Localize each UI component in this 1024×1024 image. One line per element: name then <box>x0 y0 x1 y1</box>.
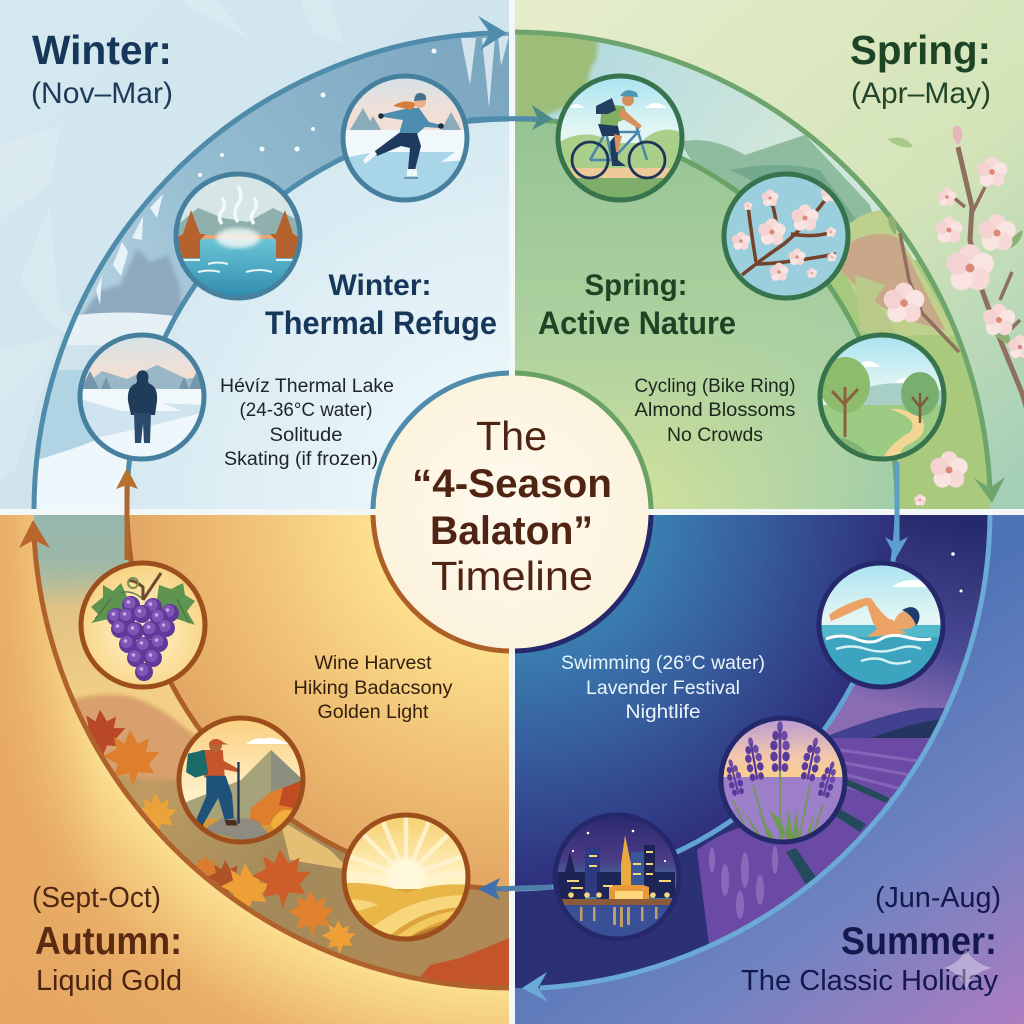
icon: Hévíz thermal lake <box>176 174 300 298</box>
icon: swimmer <box>819 563 943 687</box>
activities: autumn: Hiking Badacsony <box>294 678 453 699</box>
arrow: summer outer head <box>522 972 548 1002</box>
icon: golden sun over fields <box>344 815 468 939</box>
arrow: spring to summer <box>885 462 908 558</box>
activities: spring: Almond Blossoms <box>634 400 796 421</box>
inner autumn arc <box>127 515 509 889</box>
title text: Balaton” <box>430 509 593 553</box>
panel: winter <box>0 0 509 509</box>
arrow: spring outer head <box>974 477 1005 503</box>
icon: hiker <box>179 718 303 842</box>
dates: autumn: (Sept-Oct) <box>32 882 161 914</box>
icon: spring path and trees <box>820 335 944 459</box>
panel: autumn <box>0 515 509 1024</box>
heading: summer: Summer: <box>841 920 997 963</box>
title text: The <box>476 413 547 459</box>
activities: summer: Nightlife <box>626 702 700 723</box>
icon: lavender <box>721 718 845 842</box>
dates: summer: (Jun-Aug) <box>875 882 1001 914</box>
inner summer arc <box>515 515 897 889</box>
icon: night city <box>555 815 679 939</box>
dates: spring: (Apr–May) <box>851 77 991 110</box>
activities: summer: Swimming (26°C water) <box>561 653 765 674</box>
central title badge <box>373 373 651 651</box>
panel: spring <box>515 0 1024 509</box>
activities: winter: Skating (if frozen) <box>224 449 378 470</box>
arrow: autumn outer head <box>19 520 50 548</box>
icon: almond blossoms <box>724 174 848 298</box>
activities: winter: Hévíz Thermal Lake <box>220 376 394 397</box>
panel: summer <box>515 515 1024 1024</box>
icon: person on frozen lake <box>80 335 204 459</box>
activities: spring: Cycling (Bike Ring) <box>634 376 796 397</box>
dates: winter: (Nov–Mar) <box>31 77 173 110</box>
arrow: winter outer head <box>478 16 507 50</box>
icon: grapes <box>81 563 205 687</box>
activities: winter: Solitude <box>270 425 342 446</box>
arrow: summer to autumn <box>478 878 552 900</box>
inner spring arc <box>515 119 897 509</box>
outer autumn arc <box>34 535 509 988</box>
subtitle: summer: The Classic Holiday <box>741 965 998 997</box>
activities: summer <box>561 653 765 723</box>
subtitle: winter: Winter: <box>328 269 432 302</box>
title text <box>412 413 612 599</box>
subtitle: spring <box>538 274 735 334</box>
activities: autumn: Wine Harvest <box>314 653 432 674</box>
arrow: autumn to winter <box>116 468 138 560</box>
subtitle: spring: Active Nature <box>538 305 736 341</box>
subtitle: autumn: Liquid Gold <box>36 965 182 997</box>
outer summer arc <box>540 515 990 988</box>
activities: spring <box>634 378 795 441</box>
heading: autumn: Autumn: <box>35 920 182 963</box>
title text: Timeline <box>431 553 593 599</box>
activities: autumn <box>294 653 453 723</box>
activities: winter: (24-36°C water) <box>240 400 372 421</box>
activities: winter <box>220 376 394 470</box>
subtitle: spring: Spring: <box>584 269 688 302</box>
illustration: blossom branches <box>884 126 1024 506</box>
inner winter arc <box>127 119 509 509</box>
sparkle mark <box>944 947 992 990</box>
heading: winter: Winter: <box>32 27 172 73</box>
heading: spring: Spring: <box>850 27 991 73</box>
title text: “4-Season <box>412 462 612 506</box>
subtitle: winter <box>265 269 497 341</box>
icon: ice skater <box>343 76 467 200</box>
icon: cyclist <box>558 76 682 200</box>
activities: autumn: Golden Light <box>318 702 429 723</box>
outer spring arc <box>515 32 990 490</box>
activities: spring: No Crowds <box>667 425 763 446</box>
arrow: winter to spring <box>468 105 553 130</box>
subtitle: winter: Thermal Refuge <box>265 305 497 341</box>
outer winter arc <box>34 33 490 509</box>
activities: summer: Lavender Festival <box>586 678 740 699</box>
